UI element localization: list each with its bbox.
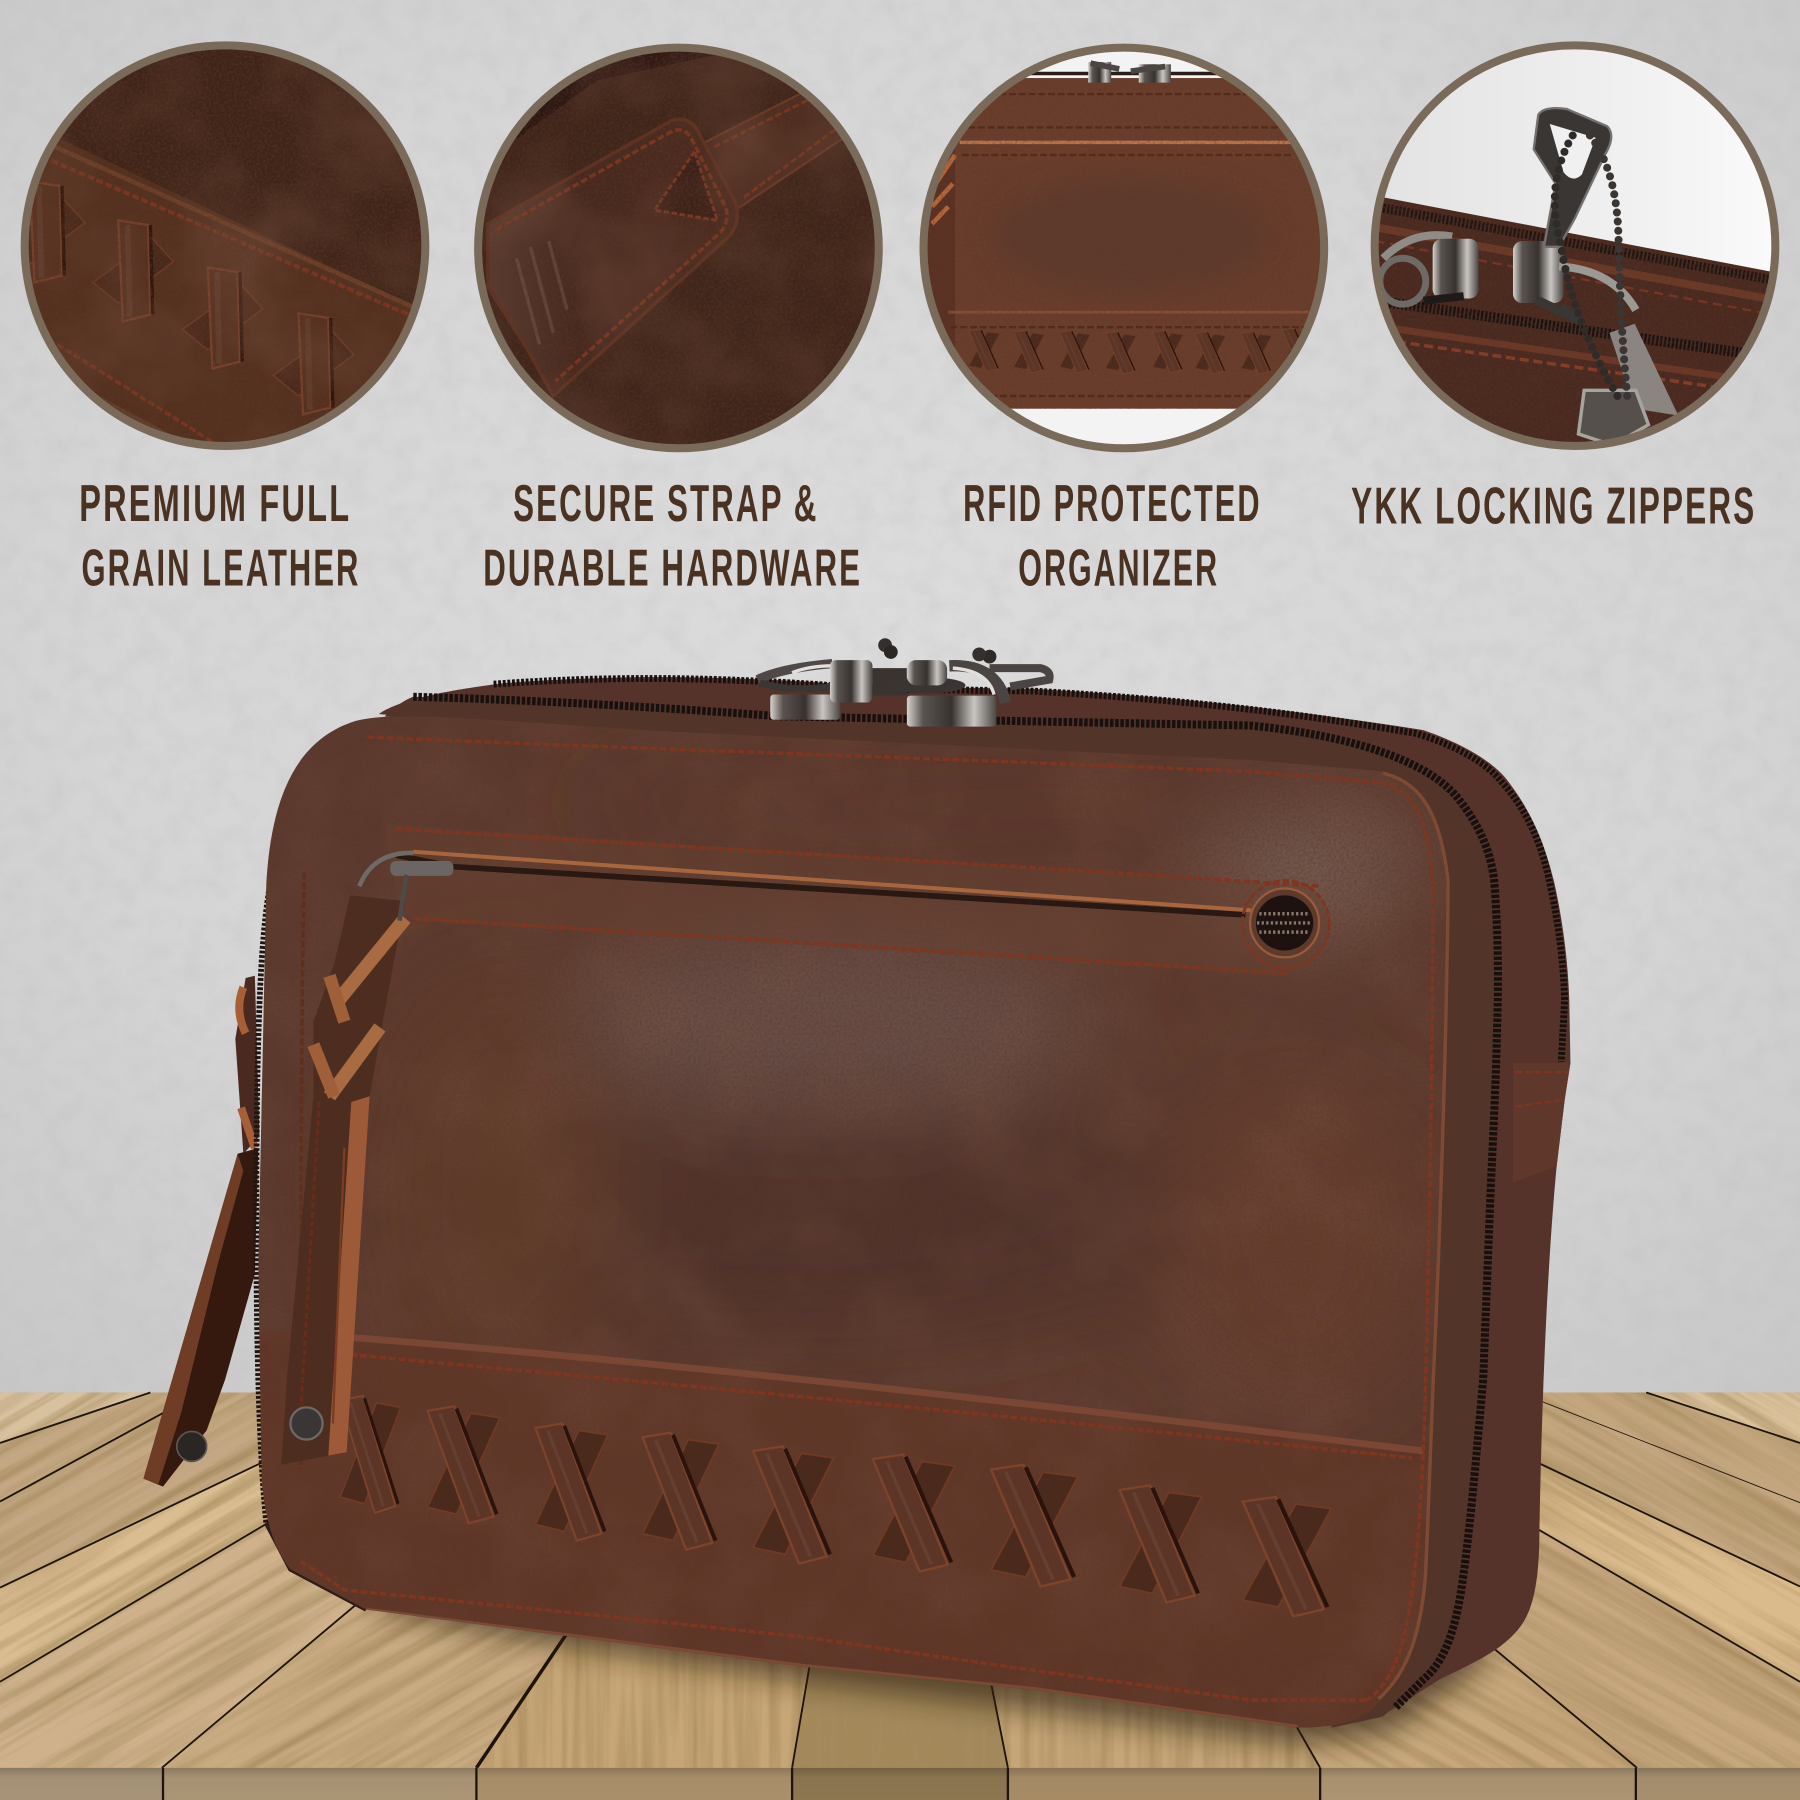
pocket zipper pull xyxy=(359,853,453,921)
panel: premium leather circle xyxy=(5,34,436,459)
heading: RFID protected organizer xyxy=(963,474,1262,596)
concrete wall background xyxy=(0,0,1800,1394)
panel: secure strap circle xyxy=(471,40,890,465)
lower band xyxy=(259,1330,1328,1728)
braided zipper tab xyxy=(281,895,405,1465)
panel: YKK zippers circle xyxy=(1366,40,1785,465)
wooden table floor xyxy=(0,1392,1800,1768)
leather bag xyxy=(143,638,1570,1745)
bag front panel xyxy=(241,700,1492,1745)
left pull tab xyxy=(143,976,259,1487)
heading: premium full grain leather xyxy=(79,474,360,596)
heading: RFID protected organizer: ORGANIZER xyxy=(1018,538,1219,596)
side pocket edge xyxy=(1513,1063,1570,1182)
heading: secure strap and durable hardware: DURABLE HARDWARE xyxy=(483,538,862,596)
pocket zipper slit xyxy=(396,852,1329,968)
heading: premium full grain leather: PREMIUM FULL xyxy=(79,474,351,532)
shadow under bag xyxy=(367,1561,1492,1745)
panel rim xyxy=(1380,771,1450,1700)
bottom lip xyxy=(366,1613,1297,1730)
bag gusset body xyxy=(379,677,1570,1728)
heading: premium full grain leather: GRAIN LEATHER xyxy=(82,538,360,596)
pocket flap xyxy=(811,882,1328,956)
zippers xyxy=(256,679,1565,1708)
heading: RFID protected organizer: RFID PROTECTED xyxy=(963,474,1262,532)
panel stitching xyxy=(301,737,1433,1700)
heading: secure strap and durable hardware xyxy=(483,474,862,596)
panel: RFID organizer circle xyxy=(918,40,1337,465)
leather cross stitches xyxy=(340,1396,1331,1616)
zipper fabric tape xyxy=(385,697,1498,1728)
heading: secure strap and durable hardware: SECURE STRAP & xyxy=(513,474,818,532)
top zipper hardware xyxy=(758,638,1050,727)
table front edge xyxy=(0,1768,1800,1800)
